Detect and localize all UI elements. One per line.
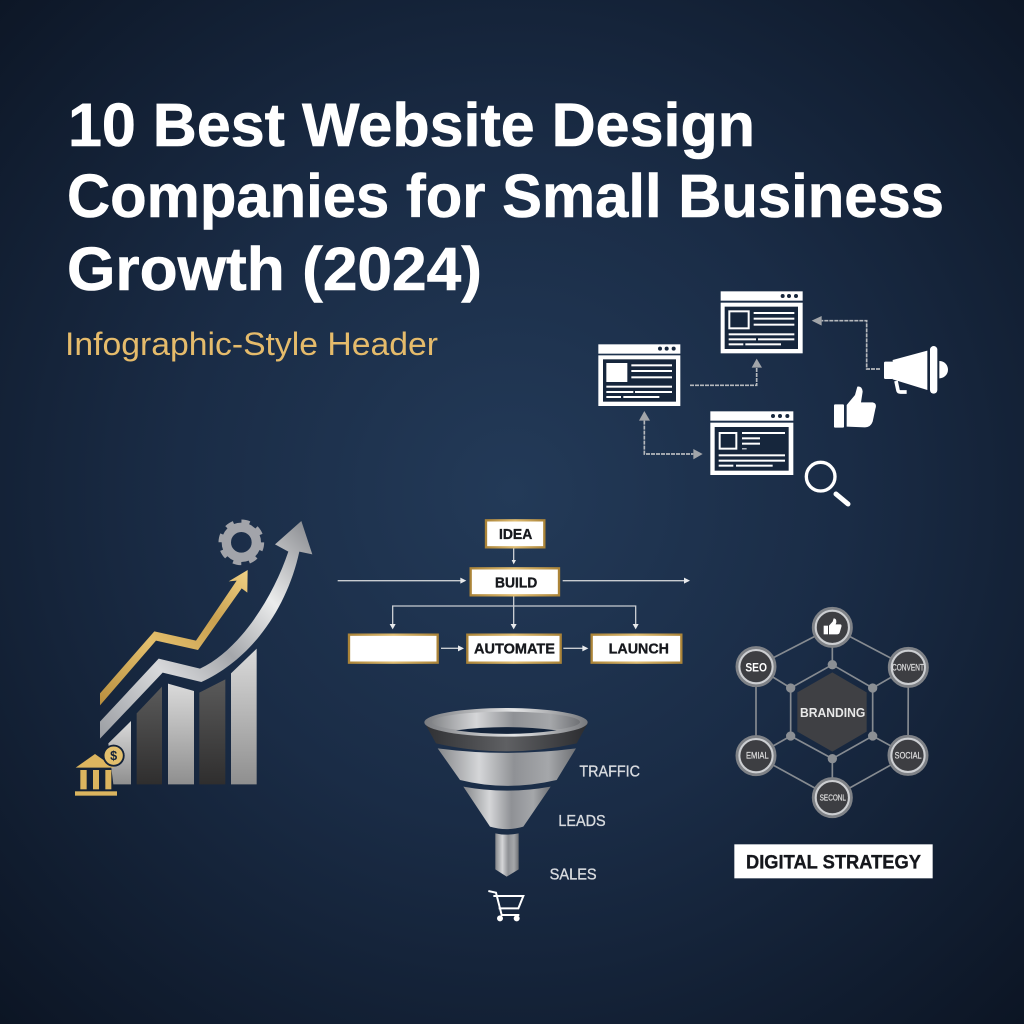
dashed arrow: left to top window	[690, 359, 762, 385]
funnel labels: SALES	[550, 866, 597, 883]
box: build	[471, 568, 559, 595]
box: idea: IDEA	[499, 527, 533, 543]
box: launch: LAUNCH	[609, 642, 669, 658]
title: Growth (2024)	[67, 235, 482, 303]
icon: thumbs up	[834, 387, 876, 428]
icon: bank with coin	[75, 745, 125, 796]
node: social	[890, 737, 926, 773]
digital strategy network	[734, 609, 933, 878]
title: Companies for Small Business	[67, 162, 944, 230]
gold growth arrow	[100, 570, 248, 705]
box: idea	[486, 520, 544, 547]
icon: magnifying glass	[806, 462, 848, 504]
central hexagon	[797, 672, 867, 752]
digital strategy label	[734, 844, 933, 878]
bars	[108, 649, 257, 784]
website window: left	[598, 344, 680, 406]
website window: top	[721, 291, 803, 353]
title	[67, 91, 944, 303]
website workflow diagram	[598, 291, 948, 504]
funnel labels: TRAFFIC	[579, 764, 640, 781]
box: automate: AUTOMATE	[474, 642, 555, 658]
icon: gear	[221, 522, 261, 562]
box: blank	[349, 635, 438, 663]
dashed arrow: megaphone to top window	[812, 316, 880, 369]
silver growth arrow	[100, 521, 312, 739]
node: like	[814, 609, 850, 645]
digital strategy label: DIGITAL STRATEGY	[746, 852, 921, 873]
icon: shopping cart	[488, 891, 523, 920]
junction dots	[786, 660, 877, 763]
sales funnel	[424, 708, 640, 920]
website window: bottom	[710, 411, 793, 475]
node: second: SECONL	[820, 793, 846, 803]
central hexagon: BRANDING	[800, 706, 865, 720]
icon: bank with coin: $	[110, 749, 117, 763]
subtitle: Infographic-Style Header	[65, 326, 438, 362]
icon: megaphone	[884, 346, 948, 394]
box: automate	[467, 635, 561, 663]
funnel labels: LEADS	[558, 813, 606, 830]
flow connectors	[338, 548, 690, 651]
title: 10 Best Website Design	[68, 91, 755, 159]
flowchart	[338, 520, 690, 663]
node: email	[738, 738, 774, 774]
dashed arrow: left and bottom windows	[639, 411, 703, 459]
funnel body	[424, 708, 588, 877]
node: second	[814, 780, 850, 816]
node: email: EMIAL	[746, 751, 769, 761]
node: SEO	[738, 649, 774, 685]
funnel labels	[550, 764, 640, 883]
box: build: BUILD	[495, 575, 537, 591]
node: social: SOCIAL	[895, 751, 922, 761]
node: content: CONVENT	[892, 662, 924, 672]
node: SEO: SEO	[745, 661, 767, 675]
box: launch	[592, 635, 681, 663]
node: content	[890, 649, 926, 685]
growth chart	[75, 521, 312, 796]
network connectors	[756, 627, 908, 798]
